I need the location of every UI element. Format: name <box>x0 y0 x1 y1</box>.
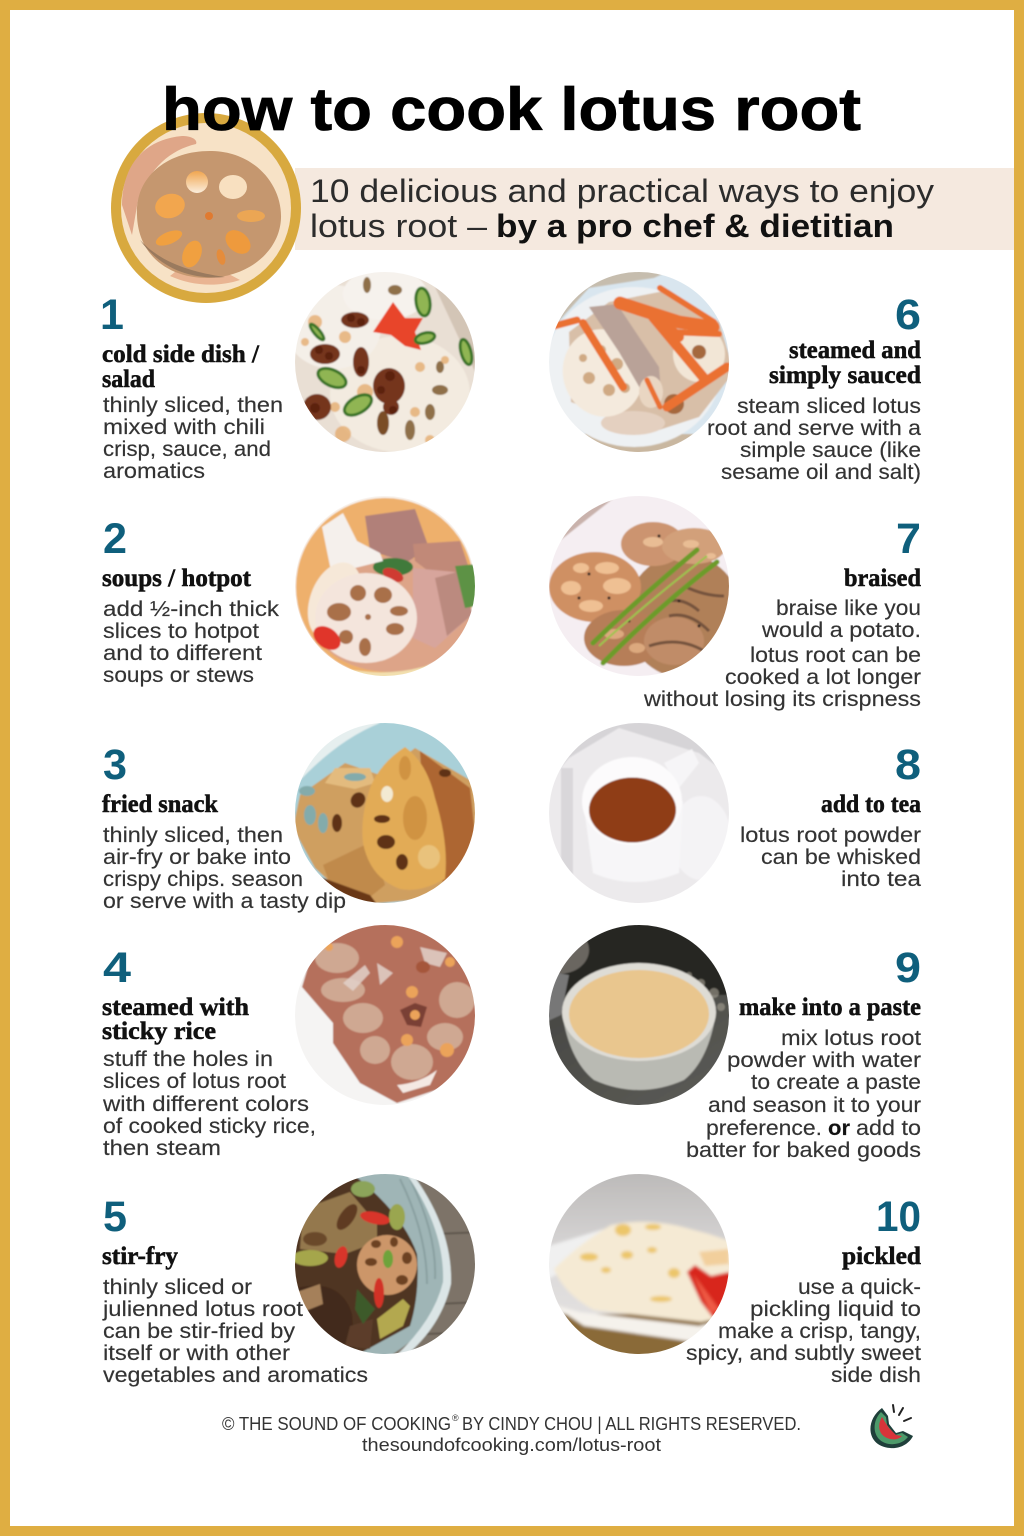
photo: lotus root soup <box>295 496 475 676</box>
description: braise like you <box>776 597 921 620</box>
heading <box>102 341 260 393</box>
description: then steam <box>103 1137 221 1160</box>
footer credit: ® <box>452 1413 459 1423</box>
description: slices to hotpot <box>103 620 259 643</box>
heading: simply sauced <box>769 362 921 389</box>
number: 7 <box>896 515 921 563</box>
panel: method 2 soups and hotpot <box>102 486 485 687</box>
heading: salad <box>102 366 155 393</box>
photo: lotus root stir-fry in blue bowl <box>295 1174 475 1354</box>
description <box>102 1276 368 1387</box>
heading: pickled <box>842 1243 921 1270</box>
heading <box>769 337 921 389</box>
photo: cup of lotus root tea <box>549 723 729 903</box>
description <box>102 1048 316 1160</box>
description: of cooked sticky rice, <box>103 1115 316 1138</box>
icon: watermelon logo <box>870 1405 913 1448</box>
footer credit: BY CINDY CHOU | ALL RIGHTS RESERVED. <box>462 1414 801 1434</box>
description <box>686 1027 921 1162</box>
description: add to <box>856 1117 921 1140</box>
photo: lotus salad with chili crisp <box>295 272 475 452</box>
description <box>707 395 921 484</box>
photo: pickled lotus root with red pepper <box>549 1174 729 1354</box>
description: can be whisked <box>761 846 921 869</box>
description: crispy chips. season <box>103 868 303 891</box>
description: thinly sliced, then <box>103 394 283 417</box>
number: 1 <box>100 291 124 339</box>
description: powder with water <box>727 1049 921 1072</box>
number: 9 <box>895 944 921 992</box>
panel: method 3 fried snack <box>102 713 485 913</box>
photo: lotus root stuffed with sticky rice <box>295 925 475 1105</box>
description: pickling liquid to <box>750 1298 921 1321</box>
description: lotus root powder <box>740 824 921 847</box>
description: lotus root can be <box>750 644 921 667</box>
photo: fried lotus chips <box>295 723 475 903</box>
description: mixed with chili <box>103 416 265 439</box>
description <box>686 1276 921 1387</box>
description: side dish <box>831 1364 921 1387</box>
heading: braised <box>844 565 921 592</box>
number: 10 <box>876 1193 921 1241</box>
heading: fried snack <box>102 791 218 818</box>
photo: lotus root and carrots in white bowl <box>549 272 729 452</box>
description: and season it to your <box>708 1094 921 1117</box>
description: thinly sliced, then <box>103 824 283 847</box>
panel: method 1 cold side dish <box>100 262 485 483</box>
description: with different colors <box>102 1093 309 1116</box>
description: preference. <box>706 1117 822 1140</box>
description: julienned lotus root <box>102 1298 303 1321</box>
heading: steamed and <box>789 337 921 364</box>
panel: method 6 steamed and simply sauced <box>539 262 921 484</box>
heading: cold side dish / <box>102 341 260 368</box>
description: or serve with a tasty dip <box>103 890 346 913</box>
heading: make into a paste <box>739 994 921 1021</box>
heading: add to tea <box>821 791 921 818</box>
panel: method 4 steamed with sticky rice <box>102 915 485 1160</box>
description: crisp, sauce, and <box>103 438 271 461</box>
description: use a quick- <box>798 1276 921 1299</box>
description: mix lotus root <box>781 1027 921 1050</box>
description: make a crisp, tangy, <box>718 1320 921 1343</box>
description: itself or with other <box>103 1342 290 1365</box>
panel: method 5 stir-fry <box>102 1164 485 1387</box>
panel: method 9 make into a paste <box>529 915 921 1162</box>
description: thinly sliced or <box>103 1276 252 1299</box>
subtitle: by a pro chef & dietitian <box>496 208 894 244</box>
description: aromatics <box>103 460 205 483</box>
subtitle band <box>295 168 1014 250</box>
title: how to cook lotus root <box>162 76 861 143</box>
heading: soups / hotpot <box>102 565 252 592</box>
subtitle: lotus root – <box>310 208 487 244</box>
panel: method 7 braised <box>539 486 921 711</box>
number: 5 <box>103 1193 127 1241</box>
description: stuff the holes in <box>103 1048 273 1071</box>
heading: steamed with <box>102 994 249 1021</box>
photo: bowl of lotus root paste <box>549 925 729 1105</box>
description: cooked a lot longer <box>725 666 921 689</box>
description: root and serve with a <box>707 417 921 440</box>
photo: braised lotus root with scallions <box>549 496 729 676</box>
number: 8 <box>895 741 921 789</box>
description <box>643 597 921 711</box>
description <box>103 394 283 483</box>
number: 2 <box>103 515 127 563</box>
description: spicy, and subtly sweet <box>686 1342 921 1365</box>
description <box>103 598 280 687</box>
heading: sticky rice <box>102 1018 216 1045</box>
subtitle: 10 delicious and practical ways to enjoy <box>310 173 934 209</box>
footer credit <box>222 1413 801 1455</box>
heading <box>102 994 249 1045</box>
description: would a potato. <box>761 619 921 642</box>
description: or <box>828 1117 850 1140</box>
panel: method 8 add to tea <box>549 723 922 903</box>
description: can be stir-fried by <box>103 1320 296 1343</box>
description: into tea <box>841 868 921 891</box>
description: simple sauce (like <box>740 439 921 462</box>
description: add ½-inch thick <box>103 598 280 621</box>
description: soups or stews <box>103 664 254 687</box>
description: slices of lotus root <box>103 1070 286 1093</box>
description: sesame oil and salt) <box>721 461 921 484</box>
footer credit: thesoundofcooking.com/lotus-root <box>362 1435 661 1455</box>
description: batter for baked goods <box>686 1139 921 1162</box>
footer credit: © THE SOUND OF COOKING <box>222 1414 451 1434</box>
hero icon: lotus root slice in gold ring <box>111 113 301 303</box>
number: 6 <box>895 291 921 339</box>
description: vegetables and aromatics <box>103 1364 368 1387</box>
description <box>103 824 346 913</box>
number: 4 <box>103 944 131 992</box>
heading: stir-fry <box>102 1243 178 1270</box>
description: steam sliced lotus <box>737 395 921 418</box>
number: 3 <box>103 741 127 789</box>
description: air-fry or bake into <box>103 846 291 869</box>
subtitle <box>310 173 934 244</box>
description: and to different <box>103 642 262 665</box>
panel: method 10 pickled <box>539 1164 921 1387</box>
description <box>740 824 921 891</box>
description: without losing its crispness <box>643 688 921 711</box>
description: to create a paste <box>751 1071 921 1094</box>
